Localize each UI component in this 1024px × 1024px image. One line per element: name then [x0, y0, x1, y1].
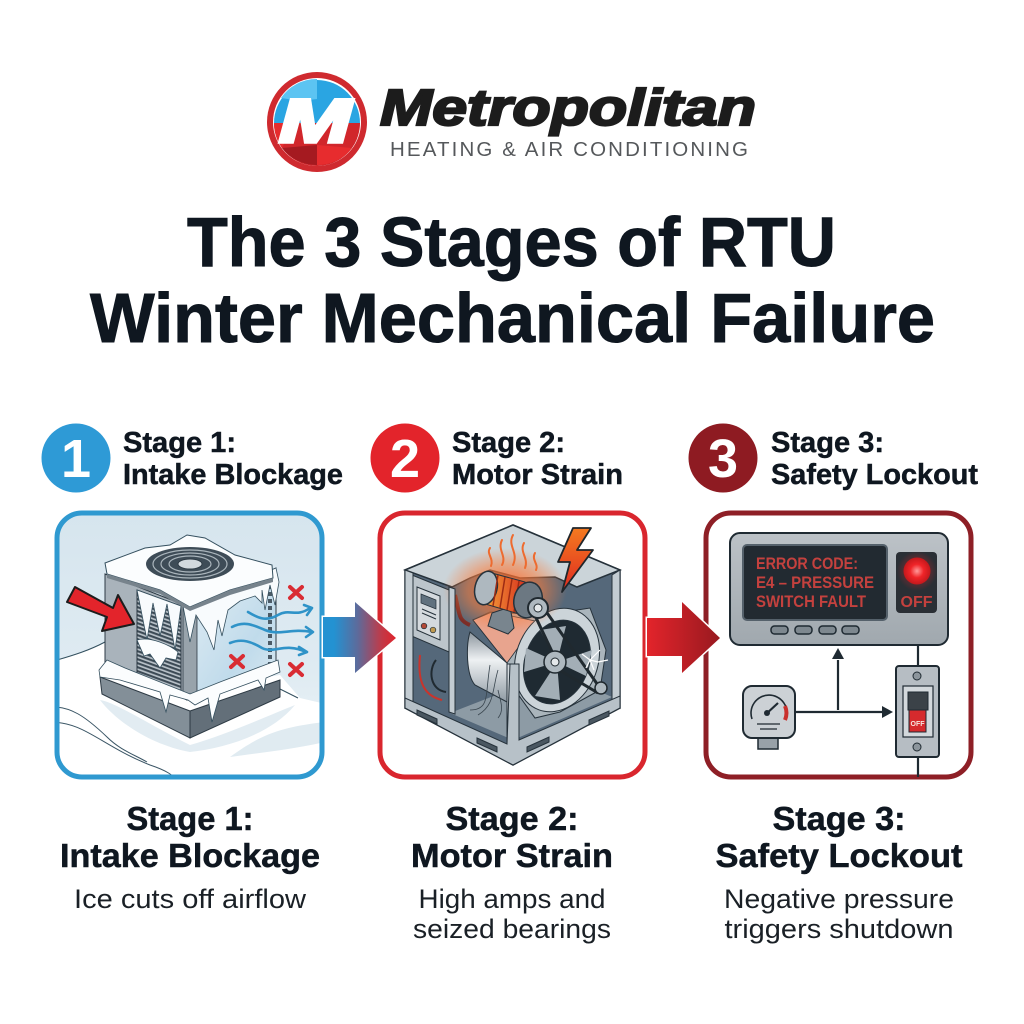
logo: Metropolitan Heating & Air Conditioning	[267, 72, 756, 172]
title: The 3 Stages of RTU	[187, 203, 836, 281]
red intake arrow	[67, 587, 134, 631]
panel: safety lockout	[706, 513, 971, 777]
off indicator	[896, 551, 937, 613]
overheated motor	[471, 569, 546, 634]
caption: stage 2: High amps and	[418, 884, 606, 914]
step header 3: 3	[708, 429, 738, 489]
rooftop unit left face	[105, 574, 187, 700]
logo wordmark: Metropolitan	[380, 79, 756, 136]
step header 2	[370, 424, 623, 492]
step header 2: 2	[390, 429, 420, 489]
red x marks	[231, 587, 302, 675]
blower housing	[467, 596, 614, 724]
cabinet top plate	[405, 525, 620, 587]
caption: stage 3	[716, 800, 963, 944]
logo tagline: HEATING & AIR CONDITIONING	[390, 138, 748, 161]
belt and pulleys	[528, 598, 607, 694]
step header 1: Intake Blockage	[123, 459, 343, 491]
cabinet frame	[405, 570, 620, 765]
heat glow	[443, 548, 567, 632]
wiring arrows	[795, 645, 918, 777]
caption: stage 3: triggers shutdown	[724, 914, 954, 944]
logo badge: M	[279, 87, 353, 155]
step header 1: 1	[61, 429, 91, 489]
step header 1	[42, 424, 343, 492]
off indicator: OFF	[900, 594, 933, 611]
caption: stage 3: Safety Lockout	[716, 837, 963, 874]
arrow: stage 2 to stage 3	[647, 602, 720, 673]
arrow: stage 1 to stage 2	[323, 602, 396, 673]
caption: stage 2: Motor Strain	[411, 837, 613, 874]
title	[90, 203, 935, 357]
control box	[407, 573, 470, 700]
bearing crack	[582, 650, 608, 670]
caption: stage 3: Stage 3:	[772, 800, 906, 837]
step header 1: Stage 1:	[123, 427, 236, 459]
caption: stage 1: Ice cuts off airflow	[74, 884, 307, 914]
blocked airflow waves	[230, 605, 313, 655]
snow clump on grille	[137, 639, 178, 668]
lightning bolt	[558, 528, 593, 592]
caption: stage 3: Negative pressure	[724, 884, 954, 914]
snow ledge	[99, 660, 280, 722]
controller with error display: ERROR CODE:	[756, 554, 858, 573]
caption: stage 1: Stage 1:	[126, 800, 254, 837]
cabinet floor	[450, 672, 612, 740]
controller with error display: E4 – PRESSURE	[756, 573, 874, 592]
lockout switch: OFF	[910, 721, 925, 728]
infographic canvas	[42, 72, 978, 944]
step header 3: Safety Lockout	[771, 459, 978, 491]
lockout switch	[896, 666, 939, 757]
logo badge	[267, 72, 367, 172]
step header 3: Stage 3:	[771, 427, 884, 459]
step header 3	[688, 424, 978, 492]
caption: stage 1	[60, 800, 320, 914]
caption: stage 2: seized bearings	[413, 914, 611, 944]
controller with error display	[730, 533, 948, 645]
rooftop unit iced right face	[183, 568, 276, 700]
caption: stage 1: Intake Blockage	[60, 837, 320, 874]
step header 2: Motor Strain	[452, 459, 623, 491]
controller buttons	[771, 626, 859, 634]
pressure gauge	[743, 686, 795, 749]
blower cabinet interior	[405, 525, 620, 765]
panel: frozen rooftop unit	[50, 513, 330, 790]
title: Winter Mechanical Failure	[90, 279, 935, 357]
rooftop unit base	[100, 677, 280, 738]
heat waves	[489, 535, 537, 570]
panel: motor strain	[380, 513, 645, 777]
snow cap with fan	[105, 535, 273, 611]
caption: stage 2	[411, 800, 613, 944]
caption: stage 2: Stage 2:	[446, 800, 578, 837]
controller with error display: SWITCH FAULT	[756, 592, 867, 611]
icicles	[137, 568, 279, 650]
step header 2: Stage 2:	[452, 427, 565, 459]
